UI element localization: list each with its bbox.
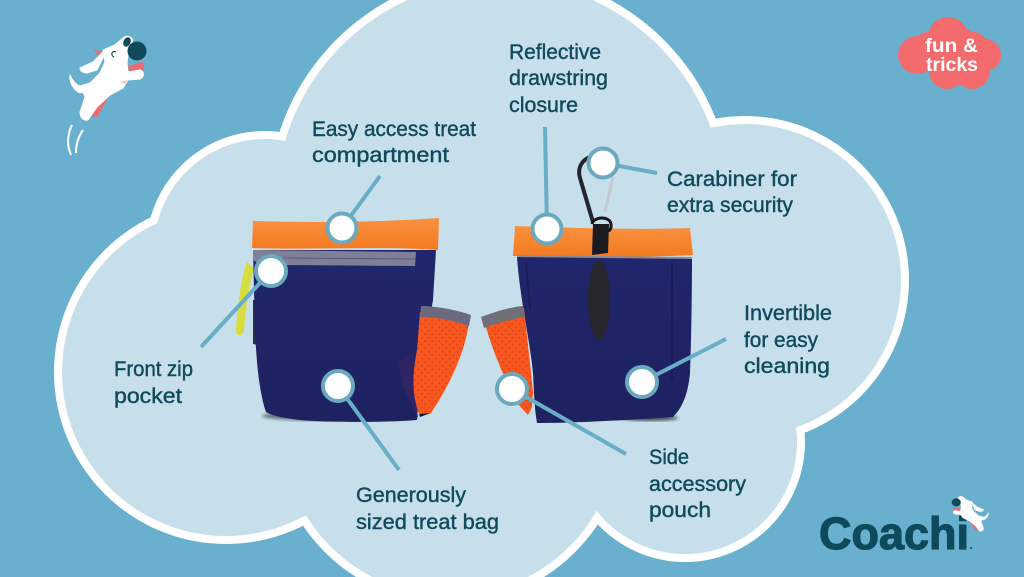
callout lines <box>201 127 726 470</box>
label: side pouch <box>649 446 747 522</box>
left treat bag <box>236 218 471 422</box>
label: front zip: pocket <box>114 385 182 408</box>
label: side pouch: Side <box>649 446 689 469</box>
callout markers <box>256 148 657 404</box>
label: front zip <box>114 358 193 408</box>
badge: fun & tricks: fun & <box>925 36 978 57</box>
drawstring toggle <box>588 260 610 340</box>
label: carabiner: Carabiner for <box>667 168 797 191</box>
label: treat bag: sized treat bag <box>356 511 499 534</box>
label: easy access <box>312 118 476 167</box>
logo: Coachi: Coachi <box>819 508 969 559</box>
label: treat bag <box>356 484 499 534</box>
label: carabiner <box>667 168 797 217</box>
label: invertible <box>744 302 832 378</box>
label: front zip: Front zip <box>114 358 193 381</box>
label: drawstring: closure <box>509 94 578 117</box>
label: invertible: cleaning <box>744 355 830 378</box>
label: easy access: compartment <box>312 144 449 167</box>
label: invertible: for easy <box>744 329 818 352</box>
label: drawstring: drawstring <box>509 67 608 90</box>
label: side pouch: accessory <box>649 473 747 496</box>
right treat bag <box>481 157 693 423</box>
carabiner <box>579 157 613 231</box>
label: carabiner: extra security <box>667 194 794 217</box>
icon: jumping dog <box>68 36 146 155</box>
label: drawstring: Reflective <box>509 41 601 64</box>
label: drawstring <box>509 41 608 117</box>
label: side pouch: pouch <box>649 499 711 522</box>
label: invertible: Invertible <box>744 302 832 325</box>
badge: fun & tricks: tricks <box>926 55 978 76</box>
label: treat bag: Generously <box>356 484 467 507</box>
label: easy access: Easy access treat <box>312 118 476 141</box>
badge: fun & tricks <box>898 17 1001 89</box>
